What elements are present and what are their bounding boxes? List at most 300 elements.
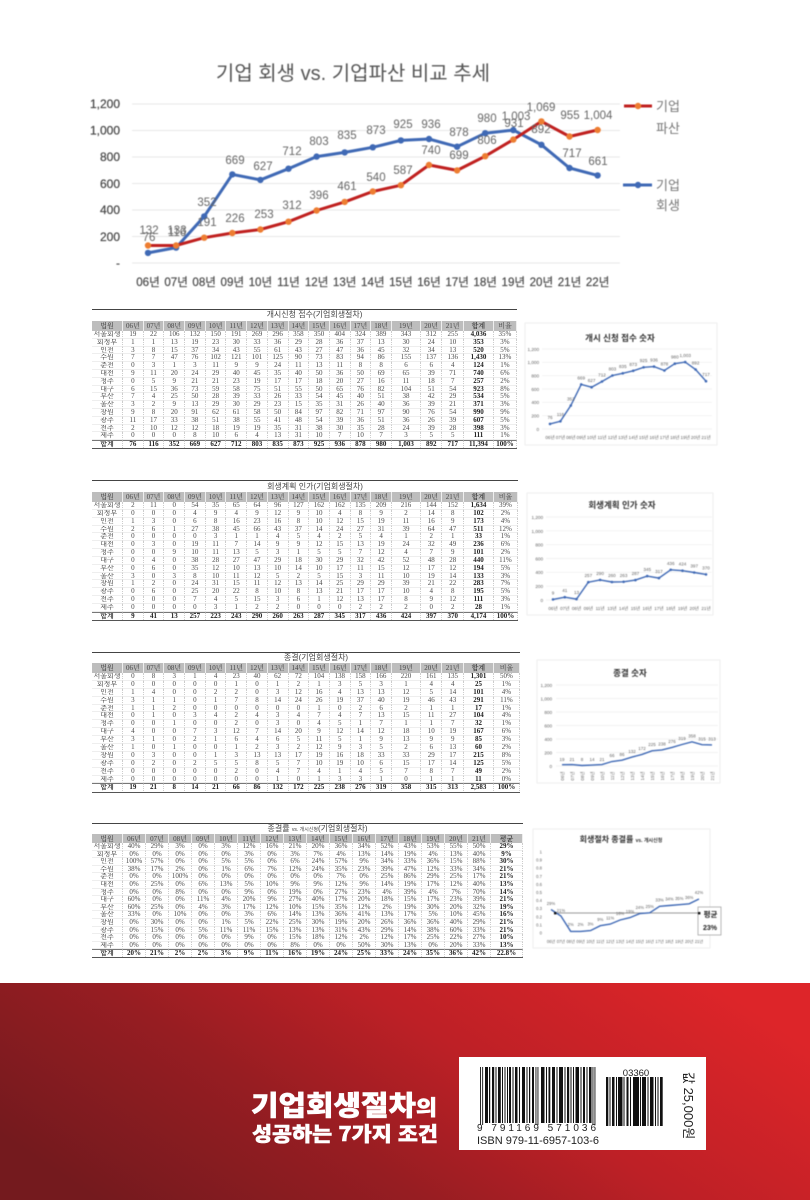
data table: 15년: [334, 835, 348, 843]
mini chart: filing counts: 11년: [598, 434, 606, 440]
data table: 878: [355, 440, 366, 448]
callout: average 23%: [698, 907, 721, 935]
mini chart: filing counts: 892: [692, 360, 700, 366]
data table: 13: [171, 612, 178, 620]
data table: [92, 663, 520, 791]
data table: 17년: [380, 835, 394, 843]
mini chart: filing counts: 07년: [556, 434, 565, 440]
mini chart: closures: 400: [544, 737, 552, 742]
mini chart: closures: 12년: [619, 772, 625, 780]
table: plan approvals: [92, 480, 518, 620]
mini chart: filing counts: 14년: [629, 434, 638, 440]
data table: 358: [401, 783, 411, 791]
addon code: 03360: [623, 1068, 649, 1079]
data labels: red series: 806: [477, 135, 497, 147]
mini chart: closure rate vs filings: 0.4: [536, 898, 543, 903]
mini chart: closures: 종결 숫자: [613, 668, 647, 678]
legend: rehabilitation: 회생: [656, 198, 680, 213]
mini chart: closure rate vs filings: 16년: [646, 938, 654, 944]
data table: 20년: [424, 664, 438, 672]
data table: 10년: [209, 493, 222, 501]
data labels: blue series: 892: [531, 124, 551, 136]
mini chart: filing counts: 12년: [608, 434, 617, 440]
mini chart: plan approvals: 345: [643, 567, 651, 572]
mini chart: filing counts: 800: [531, 374, 539, 378]
mini chart: closures: 15년: [649, 772, 655, 780]
mini chart: closure rate vs filings: 09년: [576, 938, 585, 944]
data table: 14: [191, 783, 198, 791]
data table: 08년: [167, 664, 181, 672]
data table: [92, 834, 523, 957]
data table: 21년: [472, 835, 486, 843]
data table: 06년: [126, 664, 140, 672]
data table: 법원: [100, 664, 114, 672]
mini chart: closures: 09년: [589, 772, 595, 780]
mini chart: filing counts: 개시 신청 접수 숫자: [585, 333, 655, 343]
table: closures: [92, 652, 520, 793]
footer headline: 성공하는 7가지 조건: [252, 1118, 438, 1147]
mini chart: plan approvals: 13년: [607, 605, 617, 611]
data table: 19: [129, 783, 136, 791]
mini chart: filing counts: [525, 323, 717, 445]
data table: 243: [231, 612, 242, 620]
data table: 18년: [374, 322, 388, 330]
line chart: corporate rehabilitation vs bankruptcy: 06년: [136, 276, 160, 289]
data table: 835: [272, 440, 283, 448]
mini chart: filing counts: 878: [661, 362, 669, 366]
data table: 19년: [399, 322, 413, 330]
mini chart: filing counts: 1,003: [679, 353, 691, 358]
mini chart: closures: 600: [544, 724, 552, 728]
mini chart: filing counts: 600: [531, 387, 539, 392]
data table: 06년: [126, 493, 140, 501]
mini chart: closure rate vs filings: 08년: [567, 938, 575, 944]
mini chart: plan approvals: 17년: [654, 605, 664, 611]
data labels: red series: 132: [139, 225, 159, 237]
mini chart: plan approvals: 436: [667, 561, 675, 566]
data labels: red series: 540: [366, 172, 386, 184]
data table: 319: [376, 783, 386, 791]
mini chart: plan approvals: 370: [702, 566, 710, 570]
data table: 116: [148, 440, 159, 448]
data line: rehabilitation (blue): [145, 127, 601, 256]
table title: 종결률 vs. 개시신청(기업회생절차): [268, 824, 368, 833]
data table: 10년: [209, 664, 222, 672]
mini chart: closures: 17년: [669, 772, 675, 780]
mini chart: closure rate vs filings: 34%: [665, 896, 674, 902]
data labels: red series: [139, 102, 613, 237]
mini chart: closure rate vs filings: 0.9: [536, 858, 543, 863]
red footer band: [0, 983, 810, 1200]
line chart: corporate rehabilitation vs bankruptcy: 09년: [221, 276, 244, 289]
mini chart: closures: 1,000: [540, 696, 552, 702]
mini chart: closure rate vs filings: 19년: [675, 938, 684, 944]
data table: 132: [272, 783, 283, 791]
data labels: blue series: 116: [168, 227, 186, 239]
mini chart: closures: 11년: [609, 772, 615, 780]
mini chart: filing counts: 717: [702, 372, 710, 377]
mini chart: closures: 225: [648, 742, 656, 747]
data labels: red series: 699: [449, 150, 469, 162]
mini chart: closures: 313: [708, 736, 716, 742]
mini chart: closure rate vs filings: 20년: [685, 938, 694, 944]
footer headline: 기업회생절차 의: [251, 1083, 437, 1123]
mini chart: plan approvals: 263: [620, 573, 628, 578]
mini chart: closure rate vs filings: 36%: [685, 895, 694, 900]
data table: 225: [314, 783, 324, 791]
mini chart: plan approvals: 290: [596, 571, 604, 576]
mini chart: closure rate vs filings: 21%: [557, 908, 565, 913]
callout: average 23%: 평균: [704, 909, 717, 919]
mini chart: filing counts: 18년: [670, 434, 679, 440]
data table: 12년: [250, 664, 264, 672]
mini chart: closures: 1,200: [540, 683, 552, 688]
data labels: blue series: 835: [337, 130, 357, 142]
line chart: corporate rehabilitation vs bankruptcy: -: [116, 256, 120, 270]
mini chart: plan approvals: 06년: [548, 605, 558, 611]
table: closure rate: [92, 823, 523, 958]
mini chart: plan approvals: 800: [535, 542, 543, 548]
line chart: corporate rehabilitation vs bankruptcy: 15년: [389, 276, 413, 289]
mini chart: filing counts: 1,200: [528, 347, 539, 352]
line chart: corporate rehabilitation vs bankruptcy: 22년: [586, 276, 609, 289]
mini chart: closures: 319: [678, 736, 686, 741]
data table: 06년: [127, 835, 141, 843]
mini chart: filing counts: 873: [629, 362, 637, 367]
data line: bankruptcy (red): [145, 118, 601, 249]
mini chart: closure rate vs filings: 0: [540, 930, 543, 936]
data labels: red series: 1,004: [584, 110, 613, 122]
mini chart: closures: 19: [559, 757, 565, 762]
data table: 41: [150, 612, 157, 620]
data labels: red series: 740: [421, 145, 441, 157]
data table: 합계: [100, 440, 114, 448]
line chart: corporate rehabilitation vs bankruptcy: 14년: [361, 276, 385, 289]
mini chart: closures: 800: [544, 710, 552, 715]
data table: 15년: [312, 493, 326, 501]
mini chart: filing counts: 13년: [618, 434, 627, 440]
mini chart: plan approvals: 19년: [678, 605, 687, 611]
data table: 09년: [188, 493, 202, 501]
mini chart: closure rate vs filings: 06년: [547, 938, 555, 944]
data table: 21년: [446, 322, 460, 330]
mini chart: closure rate vs filings: 11%: [606, 916, 615, 920]
mini chart: closure rate vs filings: 42%: [695, 890, 703, 895]
mini chart: closure rate vs filings: [533, 829, 721, 948]
mini chart: closure rate vs filings: 9%: [597, 917, 604, 922]
data table: 100%: [496, 440, 514, 448]
mini chart: filing counts: 06년: [545, 434, 555, 440]
mini chart: plan approvals: 424: [679, 562, 687, 566]
legend: bankruptcy: 파산: [656, 121, 680, 136]
data table: 13년: [271, 664, 285, 672]
mini chart: filing counts: 09년: [577, 434, 586, 440]
data table: 07년: [150, 835, 164, 843]
data table: 15년: [312, 664, 326, 672]
mini chart: closures: 200: [544, 750, 552, 756]
mini chart: closure rate vs filings: 25%: [646, 904, 654, 909]
table title: 종결(기업회생절차): [284, 653, 348, 662]
mini chart: plan approvals: 11년: [596, 605, 605, 611]
data table: 21년: [446, 493, 460, 501]
data table: 20년: [449, 835, 463, 843]
mini chart: closures: 06년: [559, 772, 565, 780]
data table: 08년: [173, 835, 187, 843]
data table: 4,174: [471, 612, 486, 620]
mini chart: plan approvals: 15년: [631, 605, 640, 611]
data table: 법원: [100, 322, 114, 330]
mini chart: filing counts: 803: [609, 366, 617, 372]
mini chart: closures: 16년: [659, 772, 665, 780]
data labels: red series: 587: [393, 165, 413, 177]
data table: 비율: [500, 664, 513, 672]
data table: 09년: [188, 322, 202, 330]
line chart: corporate rehabilitation vs bankruptcy: 11년: [277, 276, 300, 289]
data table: 257: [190, 612, 200, 620]
mini chart: plan approvals: 07년: [560, 605, 569, 611]
data table: 14년: [291, 322, 305, 330]
data table: 397: [426, 612, 436, 620]
mini chart: closures: 66: [609, 753, 615, 758]
mini chart: filing counts: 835: [619, 364, 627, 369]
data table: 21: [150, 783, 157, 791]
line chart: corporate rehabilitation vs bankruptcy: 800: [100, 150, 120, 164]
data labels: blue series: 878: [449, 127, 469, 139]
data table: 21년: [446, 664, 460, 672]
data table: 345: [334, 612, 345, 620]
mini chart: closure rate vs filings: 2%: [578, 922, 584, 927]
mini chart: closure rate vs filings: 17년: [655, 938, 664, 944]
data table: 18년: [403, 835, 417, 843]
data table: 317: [355, 612, 366, 620]
mini chart: closure rate vs filings: 2%: [568, 922, 574, 927]
mini chart: closures: 172: [638, 746, 646, 751]
data table: 66: [233, 783, 240, 791]
mini chart: plan approvals: 18년: [666, 605, 675, 611]
data labels: red series: 461: [337, 181, 357, 193]
data table: 11년: [230, 322, 243, 330]
data table: 14년: [311, 835, 325, 843]
data table: 12년: [250, 493, 264, 501]
data table: 100%: [497, 612, 514, 620]
mini chart: plan approvals: 09년: [584, 605, 593, 611]
data table: 873: [293, 440, 304, 448]
data labels: blue series: 873: [366, 125, 386, 137]
mini chart: plan approvals: 260: [608, 573, 616, 578]
data table: 936: [334, 440, 345, 448]
mini chart: plan approvals: 600: [535, 556, 543, 562]
data labels: blue series: 1,003: [502, 111, 530, 123]
data table: 260: [272, 612, 283, 620]
mini chart: filing counts: 116: [557, 412, 565, 417]
data labels: blue series: 712: [282, 146, 302, 158]
data table: 803: [252, 440, 262, 448]
mini chart: closure rate vs filings: 35%: [675, 896, 684, 901]
mini chart: closures: 315: [698, 736, 706, 742]
mini chart: filing counts: 10년: [587, 434, 596, 440]
mini chart: closure rate vs filings: 07년: [557, 938, 565, 944]
mini chart: plan approvals: 400: [535, 570, 543, 575]
data table: 16년: [333, 322, 347, 330]
line chart: corporate rehabilitation vs bankruptcy: 10년: [249, 276, 272, 289]
line chart: corporate rehabilitation vs bankruptcy: 18년: [473, 276, 497, 289]
data table: 법원: [100, 493, 114, 501]
mini chart: plan approvals: 397: [690, 564, 698, 568]
table title: 개시신청 접수(기업회생절차): [267, 310, 362, 319]
mini chart: closure rate vs filings: 0.1: [536, 922, 543, 927]
mini chart: closure rate vs filings: 16%: [616, 911, 625, 916]
mini chart: plan approvals: 21년: [701, 605, 711, 611]
data table: 14년: [291, 664, 305, 672]
data table: 13년: [271, 493, 285, 501]
mini chart: plan approvals: 13: [574, 590, 579, 595]
mini chart: closure rate vs filings: 0.7: [536, 874, 543, 879]
line chart: corporate rehabilitation vs bankruptcy: 12년: [305, 276, 328, 289]
data table: 16년: [357, 835, 371, 843]
barcode digits: 9 791169 571036: [477, 1123, 596, 1134]
data table: 313: [447, 783, 458, 791]
data table: 14년: [291, 493, 305, 501]
data table: 07년: [147, 493, 160, 501]
addon barcode: [606, 1077, 663, 1126]
data table: 263: [293, 612, 304, 620]
data table: 980: [376, 440, 386, 448]
data labels: blue series: 352: [197, 197, 217, 209]
data table: 352: [169, 440, 179, 448]
line chart: corporate rehabilitation vs bankruptcy: 16년: [417, 276, 441, 289]
mini chart: closure rate vs filings: 0.2: [536, 914, 543, 919]
mini chart: plan approvals: 257: [584, 573, 593, 578]
data table: 합계: [472, 322, 485, 330]
mini chart: closures: 07년: [569, 772, 575, 780]
data table: 08년: [167, 493, 181, 501]
data table: 717: [447, 440, 458, 448]
data table: 892: [426, 440, 436, 448]
mini chart: closures: 276: [668, 739, 676, 744]
data table: 86: [253, 783, 260, 791]
mini chart: plan approvals: 287: [632, 571, 640, 576]
mini chart: closures: 238: [658, 742, 666, 746]
data table: 20년: [424, 493, 438, 501]
data table: 09년: [196, 835, 210, 843]
mini chart: closures: 13년: [629, 772, 635, 780]
data table: 17년: [354, 493, 367, 501]
mini chart: closures: 0: [549, 764, 552, 769]
mini chart: plan approvals: 16년: [643, 605, 652, 611]
data labels: red series: 226: [225, 213, 245, 225]
data table: 07년: [147, 664, 160, 672]
data table: 19년: [399, 493, 413, 501]
data table: 10년: [219, 835, 233, 843]
mini chart: closures: 86: [619, 752, 625, 757]
data table: 11,394: [469, 440, 488, 448]
mini chart: plan approvals: 20년: [690, 605, 699, 611]
mini chart: plan approvals: 9: [552, 590, 555, 596]
mini chart: closure rate vs filings: 0.5: [536, 890, 543, 895]
data table: 07년: [147, 322, 160, 330]
mini chart: filing counts: 20년: [691, 434, 700, 440]
data table: 비율: [499, 493, 512, 501]
data table: [92, 492, 518, 620]
mini chart: closure rate vs filings: 0.8: [536, 866, 543, 871]
mini chart: closures: 10년: [599, 772, 605, 780]
title: main comparison chart: 기업 회생 vs. 기업파산 비교 추세: [216, 62, 490, 85]
data table: 19년: [426, 835, 440, 843]
mini chart: closure rate vs filings: 18년: [665, 938, 674, 944]
legend: rehabilitation: 기업: [656, 178, 680, 193]
data table: 20년: [424, 322, 438, 330]
data table: 18년: [374, 493, 388, 501]
legend: bankruptcy: [624, 99, 680, 136]
mini chart: closure rate vs filings: 0.6: [536, 882, 543, 887]
line chart: corporate rehabilitation vs bankruptcy: 17년: [445, 276, 469, 289]
data table: 06년: [126, 322, 140, 330]
mini chart: closures: 8: [581, 757, 584, 762]
mini chart: filing counts: 669: [577, 376, 585, 380]
data table: 172: [293, 783, 304, 791]
mini chart: plan approvals: 317: [655, 569, 663, 574]
table: filing counts: [92, 309, 517, 448]
data table: 비율: [498, 322, 512, 330]
data table: 276: [355, 783, 366, 791]
data table: 627: [210, 440, 221, 448]
data table: 15년: [312, 322, 326, 330]
data labels: blue series: 803: [309, 136, 329, 148]
data labels: blue series: 76: [143, 232, 155, 244]
mini chart: closure rate vs filings: 14년: [626, 938, 634, 944]
data table: 11년: [230, 493, 243, 501]
mini chart: filing counts: 200: [531, 414, 539, 418]
legend: bankruptcy: 기업: [656, 99, 680, 114]
data labels: red series: 191: [197, 217, 217, 229]
data labels: blue series: [143, 111, 608, 244]
data table: 법원: [100, 835, 114, 843]
mini chart: plan approvals: 08년: [572, 605, 581, 611]
line chart: corporate rehabilitation vs bankruptcy: 200: [100, 230, 120, 244]
mini chart: filing counts: 17년: [660, 434, 669, 440]
data labels: red series: 931: [504, 118, 524, 130]
data table: 712: [231, 440, 242, 448]
mini chart: plan approvals: 200: [535, 584, 543, 589]
mini chart: closure rate vs filings: 29%: [547, 901, 555, 906]
data table: 315: [426, 783, 436, 791]
mini chart: plan approvals: 1,000: [532, 529, 543, 534]
mini chart: plan approvals: 1,200: [532, 515, 543, 520]
line chart: corporate rehabilitation vs bankruptcy: 1,200: [90, 97, 120, 111]
mini chart: plan approvals: 0: [540, 598, 543, 603]
line chart: corporate rehabilitation vs bankruptcy: 07년: [164, 276, 188, 289]
line chart: corporate rehabilitation vs bankruptcy: 400: [100, 203, 120, 217]
mini chart: closures: 21년: [709, 772, 715, 780]
data table: 100%: [498, 783, 515, 791]
mini chart: filing counts: 0: [536, 427, 539, 432]
line chart: corporate rehabilitation vs bankruptcy: 19년: [502, 276, 525, 289]
mini chart: plan approvals: 14년: [619, 605, 628, 611]
price: 값 25,000원: [681, 1072, 696, 1139]
data labels: red series: 312: [282, 200, 302, 212]
mini chart: closures: 358: [688, 734, 696, 738]
legend: rehabilitation: [623, 178, 680, 213]
data labels: blue series: 980: [477, 113, 497, 125]
mini chart: filing counts: 980: [671, 354, 679, 360]
data table: [92, 321, 517, 448]
mini chart: closures: 21: [599, 757, 605, 762]
data table: 21: [212, 783, 219, 791]
callout: average 23%: 23%: [703, 925, 718, 932]
mini chart: closures: 20년: [699, 772, 705, 780]
data labels: blue series: 669: [225, 155, 245, 167]
data table: 합계: [472, 493, 485, 501]
